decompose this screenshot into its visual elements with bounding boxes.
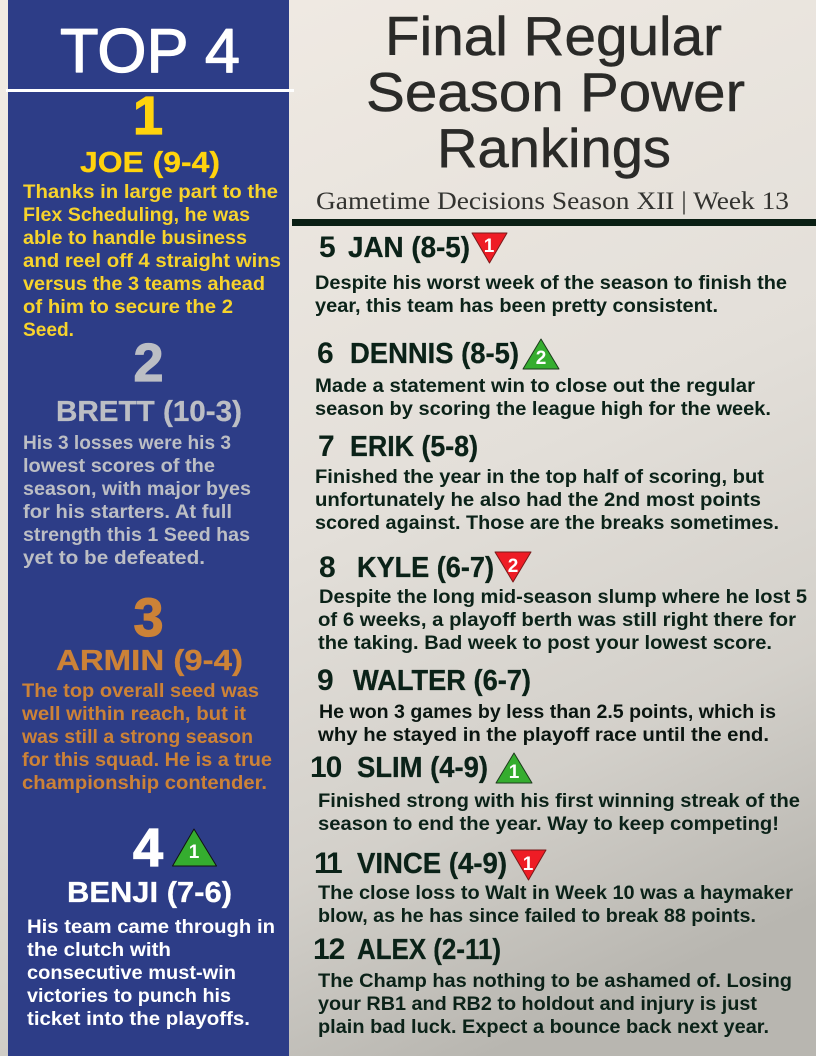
- rank 5: Jan: [315, 231, 787, 317]
- rank 7: Erik: unfortunately he also had the 2nd most points: [315, 490, 761, 511]
- rank 3: Armin: well within reach, but it: [21, 704, 247, 725]
- heading: top 4: TOP 4: [60, 17, 240, 86]
- rank 7: Erik: Finished the year in the top half of scoring, but: [315, 467, 765, 488]
- rank 5: Jan: JAN (8-5): [348, 232, 470, 264]
- rank 1: Joe: Flex Scheduling, he was: [23, 205, 250, 226]
- rank 8: Kyle: the taking. Bad week to post your lowest score.: [318, 633, 772, 654]
- rank 3: Armin: The top overall seed was: [22, 681, 259, 702]
- rank 1: Joe: Thanks in large part to the: [23, 182, 278, 203]
- rank 1: Joe: and reel off 4 straight wins: [23, 251, 281, 272]
- title: [366, 5, 745, 179]
- rank 2: Brett: strength this 1 Seed has: [23, 525, 250, 546]
- rank 2: Brett: season, with major byes: [23, 479, 251, 500]
- rank 9: Walter: He won 3 games by less than 2.5 points, which is: [319, 702, 776, 723]
- rank 11: Vince: [314, 847, 794, 927]
- icon: down 1: [472, 233, 507, 263]
- icon: up 1: [172, 829, 216, 866]
- title: Final Regular: [385, 5, 722, 67]
- rank 4: Benji: the clutch with: [27, 940, 171, 961]
- rank 12: Alex: [313, 933, 792, 1038]
- rank 7: Erik: 7: [318, 430, 335, 463]
- rank 1: Joe: able to handle business: [23, 228, 247, 249]
- rank 3: Armin: ARMIN (9-4): [56, 645, 243, 677]
- rank 4: Benji: consecutive must-win: [27, 963, 236, 984]
- rank 9: Walter: [317, 664, 776, 746]
- rank 6: Dennis: [315, 337, 771, 420]
- rank 7: Erik: ERIK (5-8): [350, 431, 478, 463]
- rank 12: Alex: ALEX (2-11): [357, 934, 501, 966]
- rank 11: Vince: VINCE (4-9): [357, 848, 507, 880]
- rank 6: Dennis: 6: [317, 337, 334, 370]
- icon: down 2: [495, 552, 531, 582]
- rank 3: Armin: for this squad. He is a true: [22, 750, 272, 771]
- rank 12: Alex: The Champ has nothing to be ashamed of. Losing: [318, 971, 792, 992]
- rank 3: Armin: 3: [133, 588, 164, 648]
- rank 8: Kyle: 8: [319, 551, 336, 584]
- icon: up 1: 1: [509, 762, 520, 783]
- rank 1: Joe: of him to secure the 2: [23, 297, 233, 318]
- rank 8: Kyle: of 6 weeks, a playoff berth was still right there for: [318, 610, 797, 631]
- rank 11: Vince: blow, as he has since failed to break 88 points.: [318, 906, 756, 927]
- subtitle: Gametime Decisions Season XII | Week 13: [316, 188, 789, 215]
- rank 8: Kyle: Despite the long mid-season slump where he lost 5: [319, 587, 807, 608]
- rank 1: Joe: 1: [133, 86, 163, 146]
- icon: up 1: [496, 753, 532, 783]
- rank 10: Slim: season to end the year. Way to keep competing!: [318, 814, 779, 835]
- rank 7: Erik: [315, 430, 779, 534]
- rank 12: Alex: plain bad luck. Expect a bounce back next year.: [318, 1017, 769, 1038]
- rank 4: Benji: 4: [133, 818, 163, 878]
- rank 6: Dennis: season by scoring the league high for the week.: [315, 399, 771, 420]
- rank 6: Dennis: Made a statement win to close out the regular: [315, 376, 756, 397]
- rank 8: Kyle: KYLE (6-7): [357, 552, 494, 584]
- rank 5: Jan: year, this team has been pretty consistent.: [315, 296, 718, 317]
- title: Rankings: [437, 117, 671, 179]
- icon: down 1: 1: [484, 236, 495, 257]
- rank 10: Slim: SLIM (4-9): [357, 752, 488, 784]
- rank 1: Joe: [23, 86, 281, 341]
- icon: up 1: 1: [189, 842, 200, 863]
- rank 12: Alex: your RB1 and RB2 to holdout and injury is just: [318, 994, 758, 1015]
- rank 4: Benji: BENJI (7-6): [67, 877, 232, 909]
- rank 7: Erik: scored against. Those are the breaks sometimes.: [315, 513, 779, 534]
- rank 11: Vince: The close loss to Walt in Week 10 was a haymaker: [318, 883, 794, 904]
- rank 4: Benji: victories to punch his: [27, 986, 231, 1007]
- icon: down 1: 1: [523, 854, 534, 875]
- rank 6: Dennis: DENNIS (8-5): [350, 338, 519, 370]
- rank 12: Alex: 12: [313, 933, 345, 966]
- rank 9: Walter: 9: [317, 664, 334, 697]
- rank 2: Brett: lowest scores of the: [23, 456, 215, 477]
- rank 4: Benji: His team came through in: [27, 917, 275, 938]
- rank 1: Joe: versus the 3 teams ahead: [23, 274, 265, 295]
- rank 2: Brett: His 3 losses were his 3: [23, 433, 231, 454]
- panel: top 4: [6, 0, 294, 1056]
- rank 4: Benji: ticket into the playoffs.: [27, 1009, 250, 1030]
- rank 2: Brett: for his starters. At full: [23, 502, 232, 523]
- rank 2: Brett: 2: [133, 333, 164, 393]
- rank 10: Slim: [310, 751, 800, 835]
- title: Season Power: [366, 61, 745, 123]
- rank 5: Jan: 5: [319, 231, 336, 264]
- rank 11: Vince: 11: [314, 847, 342, 880]
- rank 10: Slim: Finished strong with his first winning streak of the: [318, 791, 800, 812]
- icon: up 2: 2: [536, 348, 546, 369]
- rank 3: Armin: was still a strong season: [21, 727, 253, 748]
- rank 2: Brett: [23, 333, 251, 569]
- icon: up 2: [523, 339, 559, 369]
- icon: down 2: 2: [508, 556, 518, 577]
- rank 1: Joe: Seed.: [23, 320, 74, 341]
- rank 3: Armin: [21, 588, 272, 794]
- rank 2: Brett: yet to be defeated.: [23, 548, 205, 569]
- rank 4: Benji: [27, 818, 275, 1030]
- rank 2: Brett: BRETT (10-3): [56, 396, 242, 428]
- rank 9: Walter: WALTER (6-7): [353, 665, 531, 697]
- rank 1: Joe: JOE (9-4): [80, 147, 220, 179]
- rank 3: Armin: championship contender.: [22, 773, 267, 794]
- rank 9: Walter: why he stayed in the playoff race until the end.: [317, 725, 769, 746]
- rank 10: Slim: 10: [310, 751, 342, 784]
- rank 5: Jan: Despite his worst week of the season to finish the: [315, 273, 787, 294]
- icon: down 1: [511, 850, 546, 880]
- rank 8: Kyle: [318, 551, 807, 654]
